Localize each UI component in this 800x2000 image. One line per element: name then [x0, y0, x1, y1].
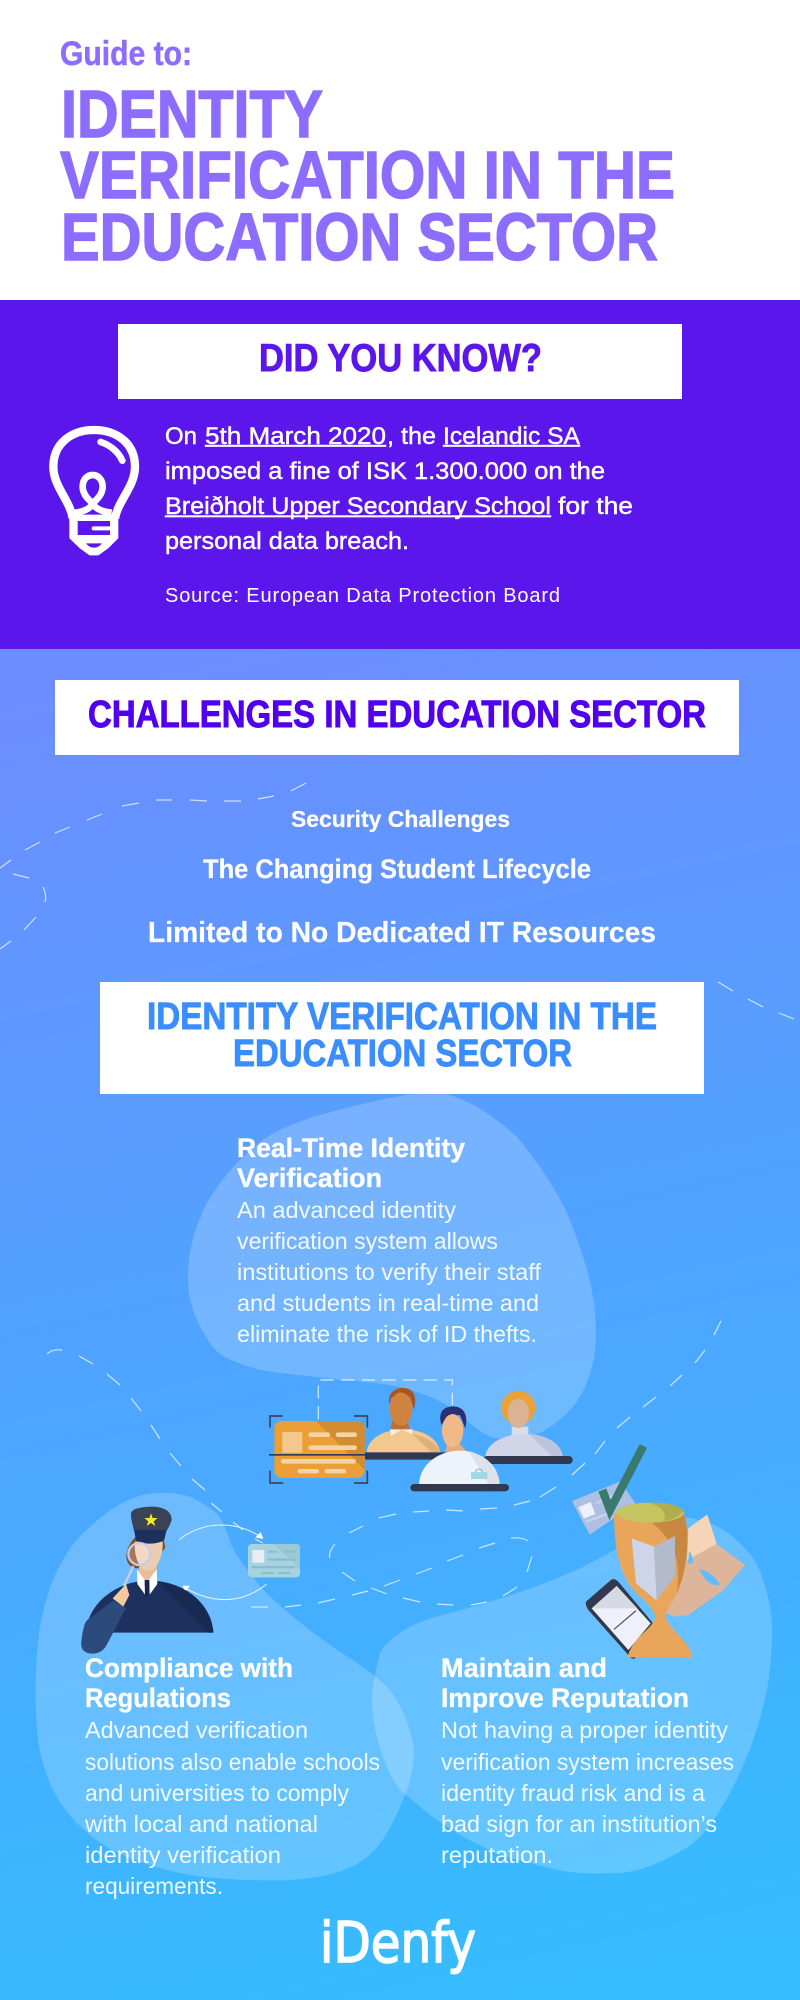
main title: IDENTITY: [61, 77, 323, 152]
text block: fine fact: personal data breach.: [165, 528, 409, 555]
feature text: real-time: Verification: [237, 1163, 382, 1193]
icon: light bulb: [53, 430, 135, 554]
feature text: real-time: and students in real-time and: [237, 1290, 539, 1316]
heading box: did you know: [118, 324, 682, 399]
blob: compliance background: [36, 1493, 414, 1881]
main title: [60, 77, 675, 275]
blob: reputation background: [372, 1517, 772, 1873]
text block: fine fact: On: [165, 423, 197, 450]
feature text: compliance: and universities to comply: [85, 1780, 349, 1806]
feature text: reputation: identity fraud risk and is a: [441, 1780, 705, 1806]
feature text: compliance: identity verification: [85, 1842, 281, 1868]
text block: fine fact: Breiðholt Upper Secondary School: [165, 493, 551, 520]
main title: VERIFICATION IN THE: [60, 138, 675, 213]
feature text: reputation: [441, 1653, 734, 1868]
heading box: identity verification: EDUCATION SECTOR: [233, 1033, 572, 1075]
text block: fine fact: 5th March 2020: [205, 423, 386, 450]
illustration: staff and ID scan: [269, 1380, 573, 1491]
list: challenges: The Changing Student Lifecycle: [203, 854, 591, 884]
text block: fine fact: imposed a fine of ISK 1.300.000 on the: [165, 458, 605, 485]
feature text: compliance: with local and national: [84, 1811, 318, 1837]
panel: title header: [0, 0, 800, 300]
panel: compliance with regulations: [36, 1493, 414, 1899]
main title: EDUCATION SECTOR: [61, 200, 658, 275]
feature text: reputation: reputation.: [441, 1842, 553, 1868]
feature text: compliance: [84, 1653, 380, 1899]
panel: real-time identity verification: [188, 1092, 596, 1491]
feature text: real-time: [237, 1133, 542, 1347]
heading box: challenges: CHALLENGES IN EDUCATION SECTOR: [88, 694, 706, 736]
text block: fine fact: , the: [387, 423, 436, 450]
source line: Source: European Data Protection Board: [165, 585, 560, 607]
feature text: reputation: Improve Reputation: [441, 1683, 689, 1713]
feature text: real-time: Real-Time Identity: [237, 1133, 465, 1163]
list: challenges: Security Challenges: [291, 806, 510, 832]
heading box: challenges: [55, 680, 739, 755]
feature text: compliance: Compliance with: [85, 1653, 293, 1683]
illustration: trophy, mask and phone: [573, 1446, 745, 1659]
heading box: identity verification: IDENTITY VERIFICATION IN THE: [147, 996, 657, 1038]
blob: real-time background: [188, 1092, 596, 1438]
list: challenges: [148, 806, 656, 949]
feature text: compliance: requirements.: [85, 1873, 223, 1899]
heading box: identity verification: [100, 982, 704, 1094]
heading box: did you know: DID YOU KNOW?: [259, 337, 542, 380]
panel: maintain and improve reputation: [372, 1446, 772, 1873]
feature text: reputation: verification system increases: [441, 1749, 734, 1775]
feature text: real-time: eliminate the risk of ID thefts.: [237, 1321, 537, 1347]
panel: did you know: [0, 300, 800, 649]
feature text: real-time: verification system allows: [237, 1228, 498, 1254]
text block: fine fact: [165, 423, 633, 555]
feature text: real-time: An advanced identity: [237, 1197, 457, 1223]
eyebrow: Guide to: Guide to:: [60, 35, 192, 73]
feature text: reputation: Not having a proper identity: [441, 1717, 729, 1743]
feature text: compliance: solutions also enable schools: [85, 1749, 380, 1775]
feature text: reputation: Maintain and: [441, 1653, 607, 1683]
panel: gradient background: [0, 649, 800, 2000]
feature text: compliance: Regulations: [85, 1683, 231, 1713]
text block: fine fact: for the: [558, 493, 633, 520]
feature text: compliance: Advanced verification: [85, 1717, 308, 1743]
feature text: real-time: institutions to verify their staff: [237, 1259, 542, 1285]
feature text: reputation: bad sign for an institution’s: [441, 1811, 717, 1837]
illustration: inspector with ID card: [81, 1507, 300, 1654]
dashed route lines: [0, 783, 794, 1607]
logo: iDenfy: iDenfy: [320, 1911, 476, 1976]
list: challenges: Limited to No Dedicated IT Resources: [148, 917, 656, 949]
text block: fine fact: Icelandic SA: [443, 423, 580, 450]
